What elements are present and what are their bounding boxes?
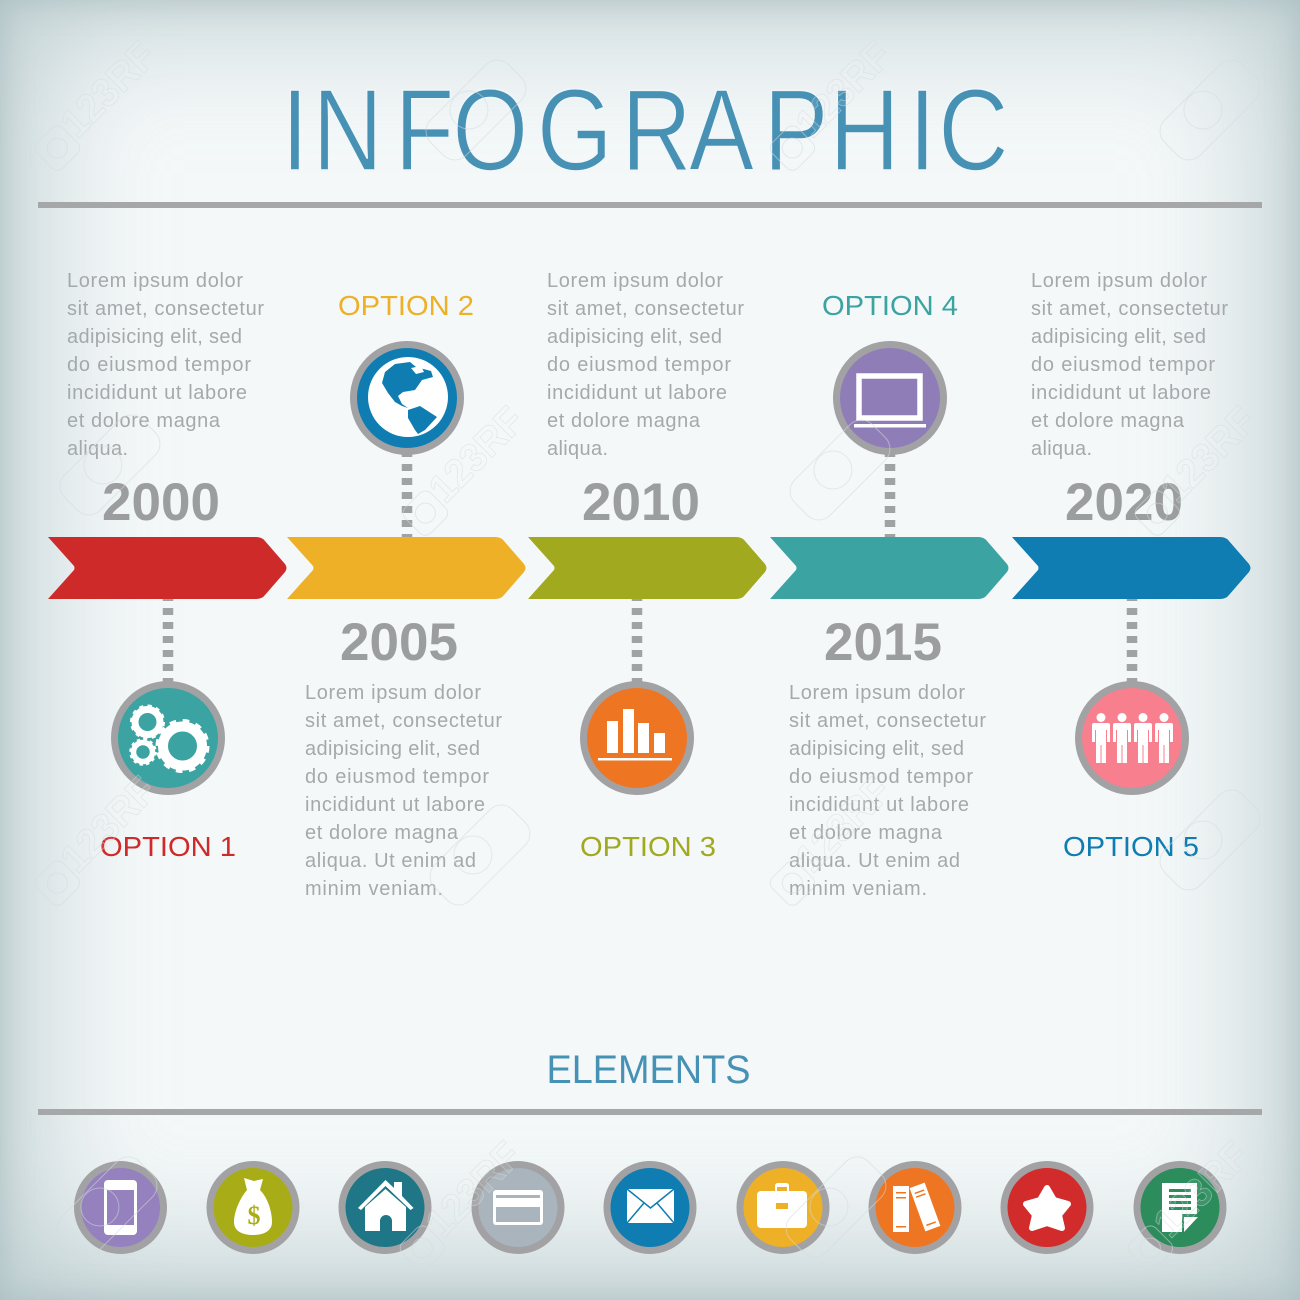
text block: 2010: adipisicing elit, sed xyxy=(547,326,722,348)
text block: 2015: minim veniam. xyxy=(789,878,927,900)
icon: books xyxy=(872,1164,958,1250)
text block: 2010: sit amet, consectetur xyxy=(547,298,744,320)
text block: 2005: incididunt ut labore xyxy=(305,794,485,816)
connector lines xyxy=(168,450,1132,690)
icon: gears xyxy=(114,684,222,792)
text block: 2010: incididunt ut labore xyxy=(547,382,727,404)
year 2020: 2020 xyxy=(1065,473,1183,532)
text block: 2000: sit amet, consectetur xyxy=(67,298,264,320)
text block: 2015: do eiusmod tempor xyxy=(789,766,973,788)
icon: phone xyxy=(78,1164,164,1250)
title: INFOGRAPHIC xyxy=(281,65,1009,195)
text block: 2000: incididunt ut labore xyxy=(67,382,247,404)
year 2015: 2015 xyxy=(824,613,942,672)
watermarks: 123RF xyxy=(1152,399,1265,511)
timeline arrows xyxy=(48,537,1250,599)
icon: credit card xyxy=(475,1164,561,1250)
option 5 label: OPTION 5 xyxy=(1063,831,1199,862)
top divider xyxy=(38,202,1262,208)
text block: 2020: incididunt ut labore xyxy=(1031,382,1211,404)
text block: 2010 xyxy=(547,270,744,460)
text block: 2000: do eiusmod tempor xyxy=(67,354,251,376)
watermarks: 123RF xyxy=(52,769,165,881)
text block: 2015: Lorem ipsum dolor xyxy=(789,682,965,704)
text block: 2005: et dolore magna xyxy=(305,822,459,844)
text block: 2005: minim veniam. xyxy=(305,878,443,900)
option 1 label: OPTION 1 xyxy=(100,831,236,862)
watermarks: 123RF xyxy=(1145,1134,1258,1246)
arrow: 2010 xyxy=(528,537,766,599)
year 2010: 2010 xyxy=(582,473,700,532)
text block: 2005: aliqua. Ut enim ad xyxy=(305,850,476,872)
text block: 2010: et dolore magna xyxy=(547,410,701,432)
text block: 2005: Lorem ipsum dolor xyxy=(305,682,481,704)
text block: 2000: et dolore magna xyxy=(67,410,221,432)
text block: 2020: sit amet, consectetur xyxy=(1031,298,1228,320)
icon: laptop xyxy=(836,344,944,452)
icon: globe xyxy=(354,344,460,452)
text block: 2020 xyxy=(1031,270,1228,460)
text block: 2020: adipisicing elit, sed xyxy=(1031,326,1206,348)
text block: 2000: Lorem ipsum dolor xyxy=(67,270,243,292)
text block: 2015: sit amet, consectetur xyxy=(789,710,986,732)
text block: 2000: aliqua. xyxy=(67,438,128,460)
text block: 2015: incididunt ut labore xyxy=(789,794,969,816)
text block: 2000 xyxy=(67,270,264,460)
year 2000: 2000 xyxy=(102,473,220,532)
watermarks: 123RF xyxy=(420,399,533,511)
arrow: 2000 xyxy=(48,537,286,599)
arrow: 2015 xyxy=(770,537,1008,599)
text block: 2005: do eiusmod tempor xyxy=(305,766,489,788)
text block: 2015: aliqua. Ut enim ad xyxy=(789,850,960,872)
text block: 2020: Lorem ipsum dolor xyxy=(1031,270,1207,292)
icon: envelope xyxy=(607,1164,693,1250)
text block: 2020: aliqua. xyxy=(1031,438,1092,460)
text block: 2005: sit amet, consectetur xyxy=(305,710,502,732)
arrow: 2020 xyxy=(1012,537,1250,599)
icon: star xyxy=(1004,1164,1090,1250)
option 4 label: OPTION 4 xyxy=(822,290,958,321)
text block: 2010: Lorem ipsum dolor xyxy=(547,270,723,292)
watermarks: 123RF xyxy=(417,1134,530,1246)
icon: house xyxy=(342,1164,428,1250)
icon: bar chart xyxy=(584,684,690,792)
watermarks: 123RF xyxy=(52,34,165,146)
text block: 2010: do eiusmod tempor xyxy=(547,354,731,376)
icon: document xyxy=(1137,1164,1223,1250)
icon: money bag xyxy=(210,1164,296,1250)
watermarks: 123RF xyxy=(787,34,900,146)
text block: 2000: adipisicing elit, sed xyxy=(67,326,242,348)
option 2 label: OPTION 2 xyxy=(338,290,474,321)
bottom divider xyxy=(38,1109,1262,1115)
text block: 2005: adipisicing elit, sed xyxy=(305,738,480,760)
text block: 2005 xyxy=(305,682,502,900)
text block: 2020: et dolore magna xyxy=(1031,410,1185,432)
icon row xyxy=(78,1164,1223,1250)
arrow: 2005 xyxy=(287,537,526,599)
icon: people xyxy=(1078,684,1186,792)
watermarks: 123RF xyxy=(787,769,900,881)
text block: 2010: aliqua. xyxy=(547,438,608,460)
text block: 2015 xyxy=(789,682,986,900)
year 2005: 2005 xyxy=(340,613,458,672)
text block: 2020: do eiusmod tempor xyxy=(1031,354,1215,376)
icon: money bag: $ xyxy=(248,1201,260,1230)
elements heading: ELEMENTS xyxy=(546,1048,750,1092)
text block: 2015: adipisicing elit, sed xyxy=(789,738,964,760)
option 3 label: OPTION 3 xyxy=(580,831,716,862)
text block: 2015: et dolore magna xyxy=(789,822,943,844)
icon: briefcase xyxy=(740,1164,826,1250)
